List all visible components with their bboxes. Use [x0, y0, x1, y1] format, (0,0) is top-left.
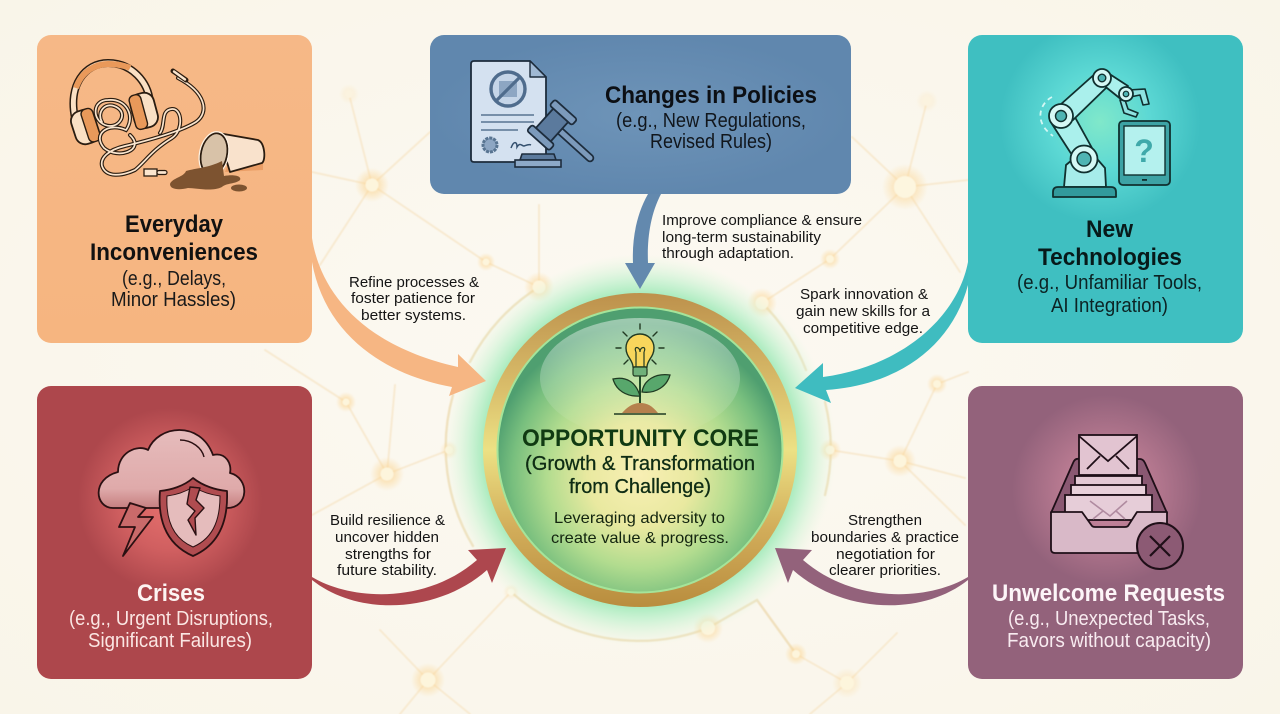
arrow: new technologies to core	[795, 262, 968, 403]
arrow: unwelcome requests to core	[775, 548, 968, 605]
caption: changes in policies benefit: Improve compliance & ensure	[662, 212, 862, 229]
caption: everyday inconveniences benefit: better systems.	[361, 307, 466, 324]
examples: new technologies: (e.g., Unfamiliar Tools,	[1017, 272, 1202, 294]
examples: unwelcome requests: Favors without capacity)	[1007, 630, 1211, 652]
examples: everyday inconveniences: (e.g., Delays,	[122, 268, 226, 290]
icon: inbox tray with rejected mail	[1051, 435, 1183, 569]
caption: crises benefit: strengths for	[345, 546, 431, 563]
arrow: everyday inconveniences to core	[312, 238, 486, 396]
heading: everyday inconveniences: Everyday	[125, 211, 224, 238]
caption: new technologies benefit: Spark innovation &	[800, 286, 928, 303]
arrow: crises to core	[312, 548, 506, 605]
heading: crises: Crises	[137, 580, 205, 607]
icon: storm cloud and cracked shield	[99, 430, 244, 556]
examples: changes in policies: (e.g., New Regulations,	[616, 110, 806, 132]
examples: crises: (e.g., Urgent Disruptions,	[69, 608, 273, 630]
heading: everyday inconveniences: Inconveniences	[90, 239, 258, 266]
caption: new technologies benefit: gain new skills for a	[796, 303, 931, 320]
caption: crises benefit: uncover hidden	[335, 529, 439, 546]
panel: new technologies	[968, 35, 1243, 343]
panel: everyday inconveniences	[37, 35, 312, 343]
caption: everyday inconveniences benefit: Refine processes &	[349, 274, 479, 291]
caption: unwelcome requests benefit: negotiation for	[836, 546, 935, 563]
examples: unwelcome requests: (e.g., Unexpected Tasks,	[1008, 608, 1210, 630]
icon: document and gavel	[471, 61, 590, 167]
panel: crises	[37, 386, 312, 679]
heading: opportunity core: OPPORTUNITY CORE	[522, 425, 759, 452]
caption: changes in policies benefit: through adaptation.	[662, 245, 794, 262]
caption: changes in policies benefit: long-term sustainability	[662, 229, 822, 246]
description: core: create value & progress.	[551, 530, 729, 547]
core glow	[444, 254, 836, 646]
heading: changes in policies: Changes in Policies	[605, 82, 817, 109]
heading: new technologies: New	[1086, 216, 1133, 243]
subheading: growth and transformation: (Growth & Transformation	[525, 452, 755, 475]
arrow: changes in policies to core	[625, 194, 661, 289]
opportunity core	[483, 293, 797, 607]
examples: everyday inconveniences: Minor Hassles)	[111, 289, 236, 311]
description: core: Leveraging adversity to	[554, 510, 725, 527]
heading: new technologies: Technologies	[1038, 244, 1182, 271]
examples: changes in policies: Revised Rules)	[650, 131, 772, 153]
icon: tangled headphones and spilled cup	[68, 63, 264, 192]
caption: crises benefit: future stability.	[337, 562, 437, 579]
icon: robot arm and tablet	[1040, 69, 1170, 197]
icon: robot arm and tablet: ?	[1134, 133, 1154, 169]
panel: unwelcome requests	[968, 386, 1243, 679]
examples: crises: Significant Failures)	[88, 630, 252, 652]
caption: new technologies benefit: competitive edge.	[803, 320, 923, 337]
caption: everyday inconveniences benefit: foster patience for	[351, 290, 475, 307]
heading: unwelcome requests: Unwelcome Requests	[992, 580, 1225, 607]
subheading: growth and transformation: from Challenge)	[569, 475, 711, 498]
background network	[265, 84, 968, 714]
caption: unwelcome requests benefit: clearer priorities.	[829, 562, 941, 579]
caption: unwelcome requests benefit: boundaries & practice	[811, 529, 959, 546]
panel: changes in policies	[430, 35, 851, 194]
examples: new technologies: AI Integration)	[1051, 295, 1168, 317]
caption: unwelcome requests benefit: Strengthen	[848, 512, 922, 529]
caption: crises benefit: Build resilience &	[330, 512, 445, 529]
icon: lightbulb and seedling	[613, 324, 670, 414]
